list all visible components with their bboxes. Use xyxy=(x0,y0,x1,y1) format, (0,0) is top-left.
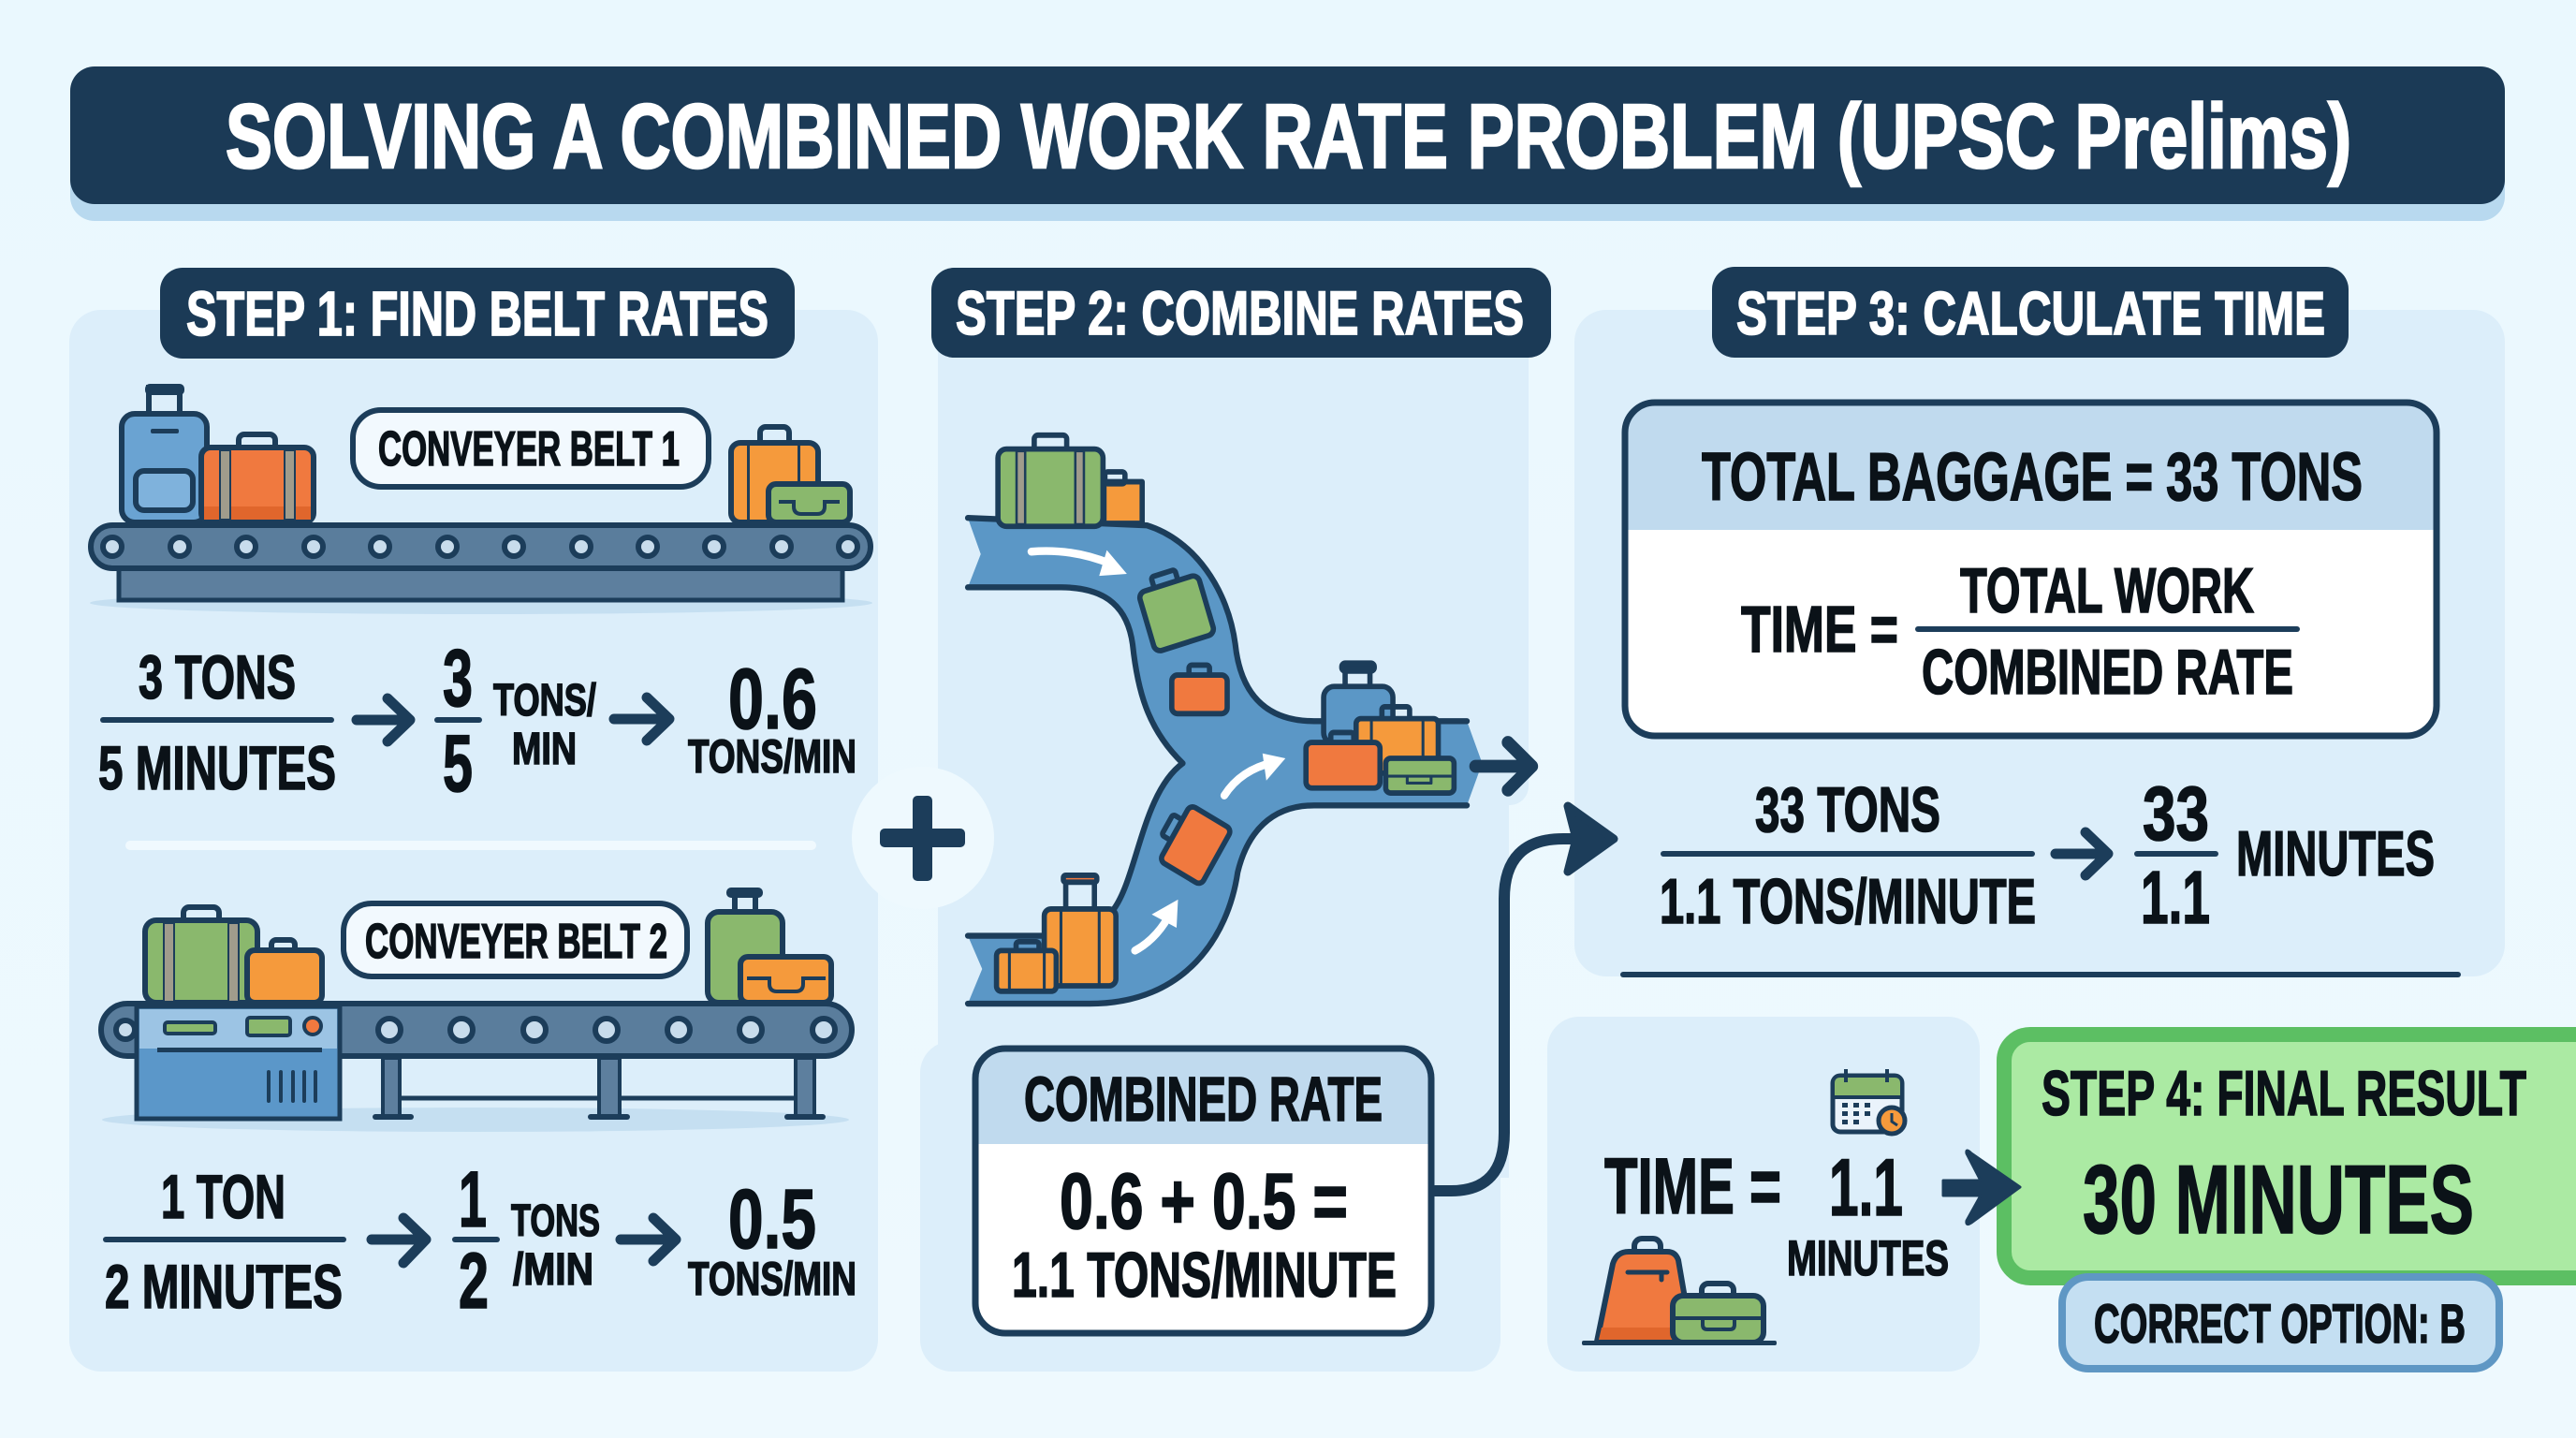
title banner xyxy=(70,66,2505,221)
panel: step 3 background xyxy=(1574,310,2505,976)
arrow xyxy=(614,697,669,741)
belt 1 rate calculation: 3 xyxy=(443,634,473,724)
panel: step 1 background xyxy=(69,310,878,1372)
callout: total baggage and time formula xyxy=(1625,403,2437,736)
luggage: top xyxy=(998,435,1142,526)
luggage: bottom xyxy=(997,875,1116,991)
callout: correct option xyxy=(2062,1277,2499,1369)
callout: combined rate: 0.6 + 0.5 = xyxy=(1060,1157,1348,1245)
time calculation: 1.1 xyxy=(2141,856,2210,939)
belt 1 rate calculation: 0.6 xyxy=(728,652,817,747)
belt 1 structure xyxy=(91,525,871,600)
time calculation: 33 xyxy=(2143,771,2209,857)
belt 1 rate calculation: 5 MINUTES xyxy=(98,733,336,802)
callout: total baggage and time formula: TIME = xyxy=(1741,593,1898,666)
icon: small orange suitcase xyxy=(247,940,322,1003)
time equals text block: 1.1 xyxy=(1829,1143,1903,1233)
label: conveyer belt 1: CONVEYER BELT 1 xyxy=(378,422,680,477)
merge track xyxy=(968,518,1482,1004)
arrow: time to final result xyxy=(1943,1151,2020,1225)
callout: combined rate: COMBINED RATE xyxy=(1024,1064,1383,1135)
white flow arrows xyxy=(1032,550,1285,950)
time equals text block xyxy=(1604,1142,1949,1286)
heading: step 1 xyxy=(160,268,795,359)
panel: time result background xyxy=(1547,1017,1980,1372)
panel: step 2 background xyxy=(920,312,1529,1372)
heading: step 1: STEP 1: FIND BELT RATES xyxy=(186,279,768,349)
belt 2 rate calculation: 1 xyxy=(459,1155,487,1243)
time calculation xyxy=(1660,771,2435,939)
merging conveyor illustration xyxy=(968,435,1532,1004)
time calculation: 33 TONS xyxy=(1755,774,1940,845)
belt 2 rate calculation: TONS/MIN xyxy=(688,1253,856,1305)
icon: orange suitcase xyxy=(201,434,314,522)
arrow: merge exit xyxy=(1475,742,1532,790)
time calculation: MINUTES xyxy=(2236,818,2435,889)
label: conveyer belt 2: CONVEYER BELT 2 xyxy=(365,915,667,969)
belt 1 rate calculation: 5 xyxy=(443,719,473,809)
belt 1 rate calculation xyxy=(98,634,856,809)
result box: step 4 xyxy=(2004,1034,2576,1278)
belt 2 rate calculation xyxy=(103,1155,856,1325)
luggage: moving on upper branch xyxy=(1135,564,1227,713)
heading: step 3 xyxy=(1712,267,2349,358)
heading: step 2: STEP 2: COMBINE RATES xyxy=(956,278,1524,347)
belt 2 rate calculation: /MIN xyxy=(513,1245,593,1295)
heading: step 3: STEP 3: CALCULATE TIME xyxy=(1736,279,2325,347)
belt 1 rate calculation: TONS/ xyxy=(493,676,596,726)
belt 2 rate calculation: 2 xyxy=(459,1237,489,1325)
luggage: moving on lower branch xyxy=(1150,800,1232,886)
icon: green suitcase xyxy=(145,907,257,1003)
label: conveyer belt 1 xyxy=(353,410,709,487)
heading: step 2 xyxy=(931,268,1551,358)
callout: combined rate: 1.1 TONS/MINUTE xyxy=(1012,1240,1397,1311)
callout: combined rate xyxy=(975,1049,1431,1333)
arrow: combined rate to step 3 xyxy=(1435,806,1614,1191)
icon: plus sign xyxy=(852,767,994,909)
belt 1 rate calculation: MIN xyxy=(512,725,577,774)
time equals text block: TIME = xyxy=(1604,1142,1781,1230)
belt 2 rate calculation: 1 TON xyxy=(161,1162,285,1231)
arrow xyxy=(357,698,410,741)
icon: right orange and green luggage xyxy=(731,427,850,522)
belt 2 rate calculation: TONS xyxy=(511,1196,600,1246)
arrow xyxy=(621,1218,676,1261)
icon: blue suitcase xyxy=(122,384,207,522)
conveyer belt 2 illustration xyxy=(101,888,852,1132)
time calculation: 1.1 TONS/MINUTE xyxy=(1660,866,2036,937)
belt 1 rate calculation: 3 TONS xyxy=(139,642,296,712)
arrow xyxy=(372,1218,426,1263)
luggage: merged group xyxy=(1306,663,1454,793)
callout: total baggage and time formula: COMBINED RATE xyxy=(1922,637,2293,708)
belt 2 rate calculation: 2 MINUTES xyxy=(105,1252,343,1321)
machine housing xyxy=(137,1006,340,1119)
callout: total baggage and time formula: TOTAL WORK xyxy=(1960,555,2254,626)
icon: orange bag and green case xyxy=(1582,1239,1777,1345)
belt 2 rate calculation: 0.5 xyxy=(728,1173,816,1267)
belt 2 structure xyxy=(101,1004,852,1120)
time equals text block: MINUTES xyxy=(1787,1231,1949,1286)
label: conveyer belt 2 xyxy=(344,903,687,976)
arrow xyxy=(2056,832,2108,875)
icon: right green and orange luggage xyxy=(708,888,831,1003)
conveyer belt 1 illustration xyxy=(90,384,872,614)
icon: calendar with clock xyxy=(1833,1069,1905,1134)
belt 1 rate calculation: TONS/MIN xyxy=(688,730,856,783)
